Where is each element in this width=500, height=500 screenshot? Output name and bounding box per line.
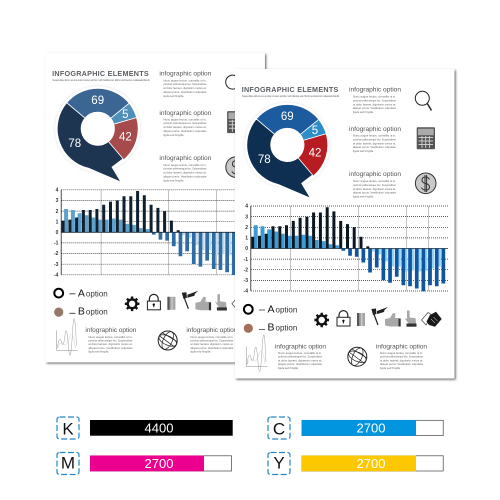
option 3: Nunc augue lectus, convallis ut in, <box>353 179 396 183</box>
option 2: Nunc augue lectus, convallis ut in, <box>353 134 396 138</box>
icon row <box>314 307 442 327</box>
back bar chart: 4 <box>56 187 59 193</box>
back bottom option 1: pulvinar pellentesque leo. Suspendisse <box>88 339 133 343</box>
yield row K: K <box>62 419 74 438</box>
option 3: infographic option <box>349 171 401 178</box>
bar chart: 1 <box>245 236 248 242</box>
bottom option 1 <box>275 343 326 370</box>
back bar chart: -3 <box>54 262 59 268</box>
back icon row <box>125 291 252 311</box>
back option 1: aliquet purus. Vestibulum vulputate <box>163 90 207 94</box>
back option 1: pulvinar pellentesque leo. Suspendisse <box>163 82 207 86</box>
option 2: at dolor laoreet, dignissim metus at, <box>353 141 396 145</box>
back donut chart: 78 <box>68 138 81 150</box>
yield row M: M <box>61 454 75 472</box>
panel: front page <box>235 69 454 378</box>
back bottom option 1: Nunc augue lectus, convallis ut in, <box>88 335 133 339</box>
back option 3: ligula sed fringilla. <box>163 178 184 182</box>
back option 1: at dolor laoreet, dignissim metus at, <box>163 86 207 90</box>
back bottom option 1: at dolor laoreet, dignissim metus at, <box>88 342 133 346</box>
back legend: Boption <box>78 305 108 317</box>
back donut chart: 42 <box>119 131 132 143</box>
donut chart: 69 <box>281 111 294 123</box>
yield row C: C <box>273 419 285 438</box>
back option 3: at dolor laoreet, dignissim metus at, <box>163 171 207 175</box>
back donut chart: 5 <box>122 109 129 121</box>
bottom option 2: infographic option <box>376 343 427 350</box>
back bar chart: 0 <box>56 230 59 236</box>
back bottom option 1: aliquet purus. Vestibulum vulputate <box>88 346 133 350</box>
bottom option 2: Nunc augue lectus, convallis ut in, <box>380 351 423 355</box>
back option 1: Nunc augue lectus, convallis ut in, <box>163 78 207 82</box>
back donut chart <box>55 86 140 182</box>
bottom option 1: at dolor laoreet, dignissim metus at, <box>278 358 322 362</box>
option 1: at dolor laoreet, dignissim metus at, <box>353 102 396 106</box>
back bar chart: 1 <box>56 219 59 225</box>
back bottom option 1: ligula sed fringilla. <box>88 350 109 354</box>
back sheet <box>45 53 265 362</box>
donut chart <box>245 102 330 198</box>
option 2: infographic option <box>349 126 401 133</box>
back bottom option 2: Nunc augue lectus, convallis ut in, <box>190 335 234 339</box>
bottom option 2: aliquet purus. Vestibulum vulputate <box>380 362 424 366</box>
back bottom option 2: pulvinar pellentesque leo. Suspendisse <box>190 339 234 343</box>
front sheet <box>235 69 454 378</box>
back option 3: aliquet purus. Vestibulum vulputate <box>163 174 207 178</box>
back option 3: infographic option <box>159 155 212 162</box>
option 2: aliquet purus. Vestibulum vulputate <box>353 145 397 149</box>
title: INFOGRAPHIC ELEMENTS <box>242 85 339 94</box>
back icon: magnifier <box>226 75 242 94</box>
back icon: line graph <box>57 318 78 355</box>
option 1 <box>349 86 401 114</box>
back subtitle: Suspendisse dictum eros at dolor sit amet porttitor morbi facilisis erat. Morbi condimentum malesuada blandit <box>52 78 150 82</box>
back option 2: ligula sed fringilla. <box>163 133 184 137</box>
icon: globe <box>347 346 368 367</box>
legend <box>244 304 297 334</box>
icon: dollar coin <box>415 173 436 194</box>
bar chart: -1 <box>244 257 248 263</box>
back bottom option 2: aliquet purus. Vestibulum vulputate <box>190 346 234 350</box>
bottom option 2: pulvinar pellentesque leo. Suspendisse <box>380 355 424 359</box>
yield row K <box>57 417 233 439</box>
yield row C: 2700 <box>357 421 385 436</box>
back bottom option 2: ligula sed fringilla. <box>190 350 211 354</box>
bottom option 2 <box>376 343 427 370</box>
option 1: Nunc augue lectus, convallis ut in, <box>353 94 396 98</box>
bottom option 1: ligula sed fringilla. <box>278 366 299 370</box>
yield row C <box>268 417 443 439</box>
back bottom option 2: infographic option <box>186 327 238 334</box>
bar chart: 3 <box>245 214 248 220</box>
back option 2: aliquet purus. Vestibulum vulputate <box>163 129 207 133</box>
bar chart: -4 <box>244 289 248 295</box>
back icon: calculator <box>227 111 245 133</box>
back option 3: pulvinar pellentesque leo. Suspendisse <box>163 167 207 171</box>
yield row Y <box>268 452 443 474</box>
yield row K: 4400 <box>145 421 173 436</box>
back option 2: pulvinar pellentesque leo. Suspendisse <box>163 121 207 125</box>
back legend <box>54 287 108 317</box>
bar chart: 0 <box>245 246 248 252</box>
legend: Aoption <box>268 304 297 316</box>
donut chart: 78 <box>258 154 271 166</box>
back icon: dollar coin <box>226 157 246 177</box>
option 3: at dolor laoreet, dignissim metus at, <box>353 187 396 191</box>
icon: magnifier <box>415 91 432 110</box>
back bar chart: 2 <box>56 209 59 215</box>
yield row M: 2700 <box>145 456 173 471</box>
option 1: aliquet purus. Vestibulum vulputate <box>353 106 397 110</box>
back option 1 <box>159 70 212 98</box>
back donut chart: 69 <box>91 95 104 107</box>
bottom option 2: at dolor laoreet, dignissim metus at, <box>380 358 423 362</box>
bottom option 2: ligula sed fringilla. <box>380 366 401 370</box>
back option 3: Nunc augue lectus, convallis ut in, <box>163 163 207 167</box>
bottom option 1: aliquet purus. Vestibulum vulputate <box>278 362 323 366</box>
back option 1: infographic option <box>159 70 212 77</box>
option 1: pulvinar pellentesque leo. Suspendisse <box>353 98 397 102</box>
yield row Y: 2700 <box>357 456 385 471</box>
bar chart: 2 <box>245 225 248 231</box>
back bottom option 2: at dolor laoreet, dignissim metus at, <box>190 342 234 346</box>
option 2 <box>349 126 401 153</box>
subtitle: Suspendisse dictum eros at dolor sit amet porttitor morbi facilisis erat. Morbi condimentum malesuada blandit <box>242 94 339 98</box>
bottom option 1: infographic option <box>275 343 326 350</box>
bar chart: -2 <box>244 267 248 273</box>
back bar chart: -1 <box>54 241 59 247</box>
option 3: ligula sed fringilla. <box>353 195 374 199</box>
option 2: ligula sed fringilla. <box>353 149 374 153</box>
back option 2: infographic option <box>159 110 212 117</box>
yield row M <box>57 452 232 474</box>
yield row Y: Y <box>273 454 285 472</box>
back option 1: ligula sed fringilla. <box>163 94 184 98</box>
back title: INFOGRAPHIC ELEMENTS <box>52 69 149 78</box>
back bar chart: 3 <box>56 198 59 204</box>
back bar chart <box>54 188 258 278</box>
bottom option 1: pulvinar pellentesque leo. Suspendisse <box>278 355 323 359</box>
option 3: aliquet purus. Vestibulum vulputate <box>353 191 397 195</box>
back legend: Aoption <box>78 287 108 299</box>
back icon: globe <box>157 330 178 351</box>
back option 3 <box>159 155 212 182</box>
option 3 <box>349 171 401 199</box>
bar chart <box>244 204 448 295</box>
bar chart: 4 <box>245 204 248 210</box>
back option 2 <box>159 110 212 137</box>
option 1: ligula sed fringilla. <box>353 110 374 114</box>
option 2: pulvinar pellentesque leo. Suspendisse <box>353 137 397 141</box>
panel: back page <box>45 53 265 362</box>
donut chart: 5 <box>312 125 318 137</box>
back bar chart: -2 <box>54 251 59 257</box>
legend: Boption <box>268 322 297 334</box>
back bottom option 2 <box>186 327 238 354</box>
bottom option 1: Nunc augue lectus, convallis ut in, <box>278 351 322 355</box>
back option 2: at dolor laoreet, dignissim metus at, <box>163 125 207 129</box>
option 3: pulvinar pellentesque leo. Suspendisse <box>353 183 397 187</box>
bar chart: -3 <box>244 278 248 284</box>
donut chart: 42 <box>309 148 321 160</box>
back bar chart: -4 <box>54 273 59 279</box>
back bottom option 1 <box>85 327 137 354</box>
icon: line graph <box>246 335 268 372</box>
icon: calculator <box>417 127 435 149</box>
option 1: infographic option <box>349 86 401 94</box>
back bottom option 1: infographic option <box>85 327 137 334</box>
back option 2: Nunc augue lectus, convallis ut in, <box>163 117 207 121</box>
